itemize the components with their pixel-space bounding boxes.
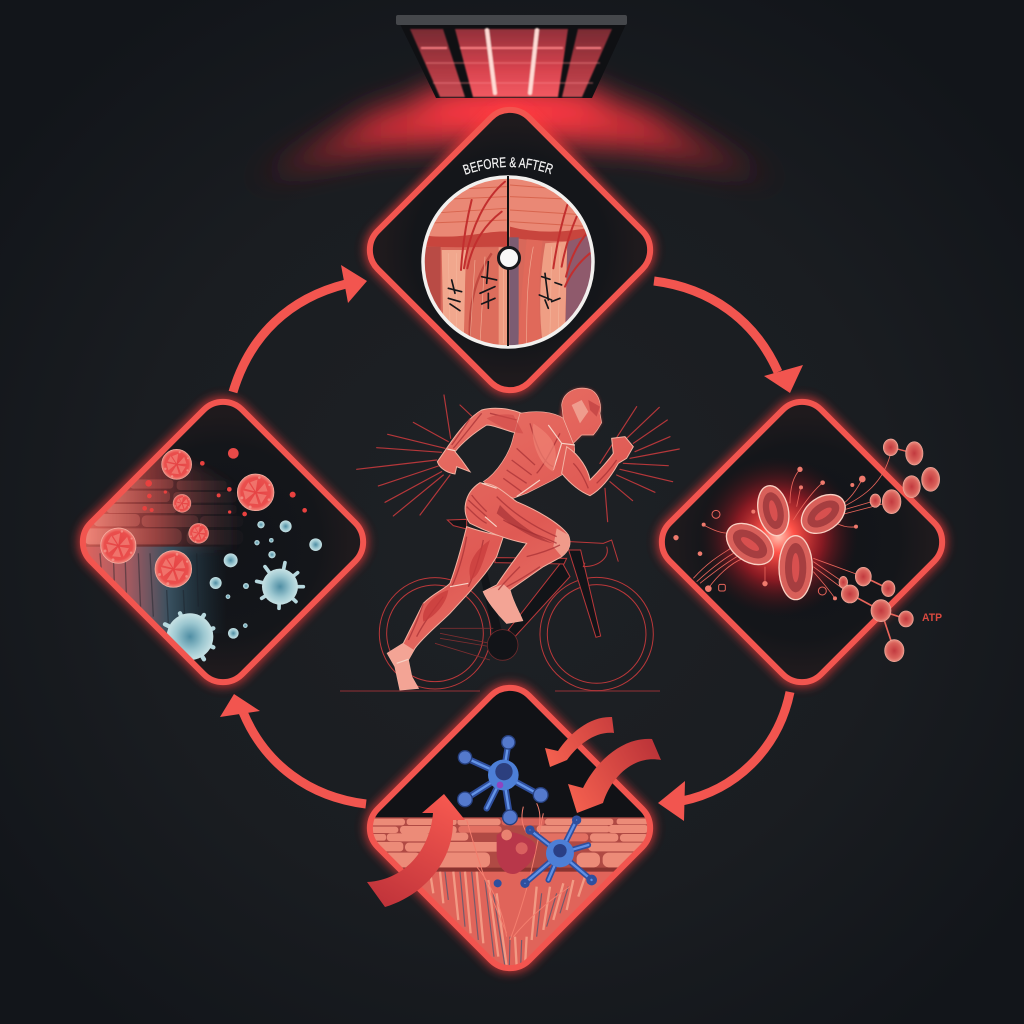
panel: ATP energy production (651, 391, 953, 693)
arrow: left to top (233, 265, 367, 392)
arrow: curved overlay right large (568, 739, 661, 813)
label: ATP: ATP (922, 612, 942, 624)
panel: inflammation clearing (72, 391, 374, 693)
arrow: bottom to left (220, 694, 366, 804)
heading: before and after: BEFORE & AFTER (462, 157, 553, 175)
central figure: runner and bicycle (340, 388, 679, 691)
arrow: top to right (654, 281, 803, 393)
head (562, 388, 602, 443)
bicycle (379, 519, 653, 691)
inflammatory particles: pale blue (210, 520, 322, 639)
arrow: curved overlay upper right small (545, 717, 614, 767)
front leg (465, 483, 570, 623)
rear leg (387, 527, 503, 690)
virus cell lower, clipped by panel (165, 613, 213, 660)
muscle definition (408, 413, 617, 640)
panel: immune response in tissue (359, 677, 661, 979)
tissue background (77, 450, 243, 633)
damaged red cell (497, 830, 536, 874)
virus cell upper (257, 563, 303, 608)
mitochondria glow cluster (673, 439, 940, 662)
arrow: right to bottom (658, 692, 790, 821)
ATP particles (839, 439, 940, 662)
energy rays (357, 395, 679, 522)
back arm (437, 408, 525, 474)
torso (483, 412, 575, 498)
immune cell: blue lower (496, 817, 595, 886)
anatomical runner (387, 388, 633, 690)
ground line (340, 690, 660, 692)
tissue cross-section (363, 803, 657, 968)
arrow: curved overlay lower left (367, 794, 465, 907)
red light beam glow (240, 82, 790, 186)
icon: red light therapy panel (396, 15, 627, 98)
inset: muscle fibres split view (420, 173, 597, 351)
front arm (562, 437, 633, 496)
inflammatory particles: red (101, 448, 322, 639)
panel: muscle repair before and after (358, 107, 662, 402)
immune cell: blue upper (458, 736, 548, 825)
